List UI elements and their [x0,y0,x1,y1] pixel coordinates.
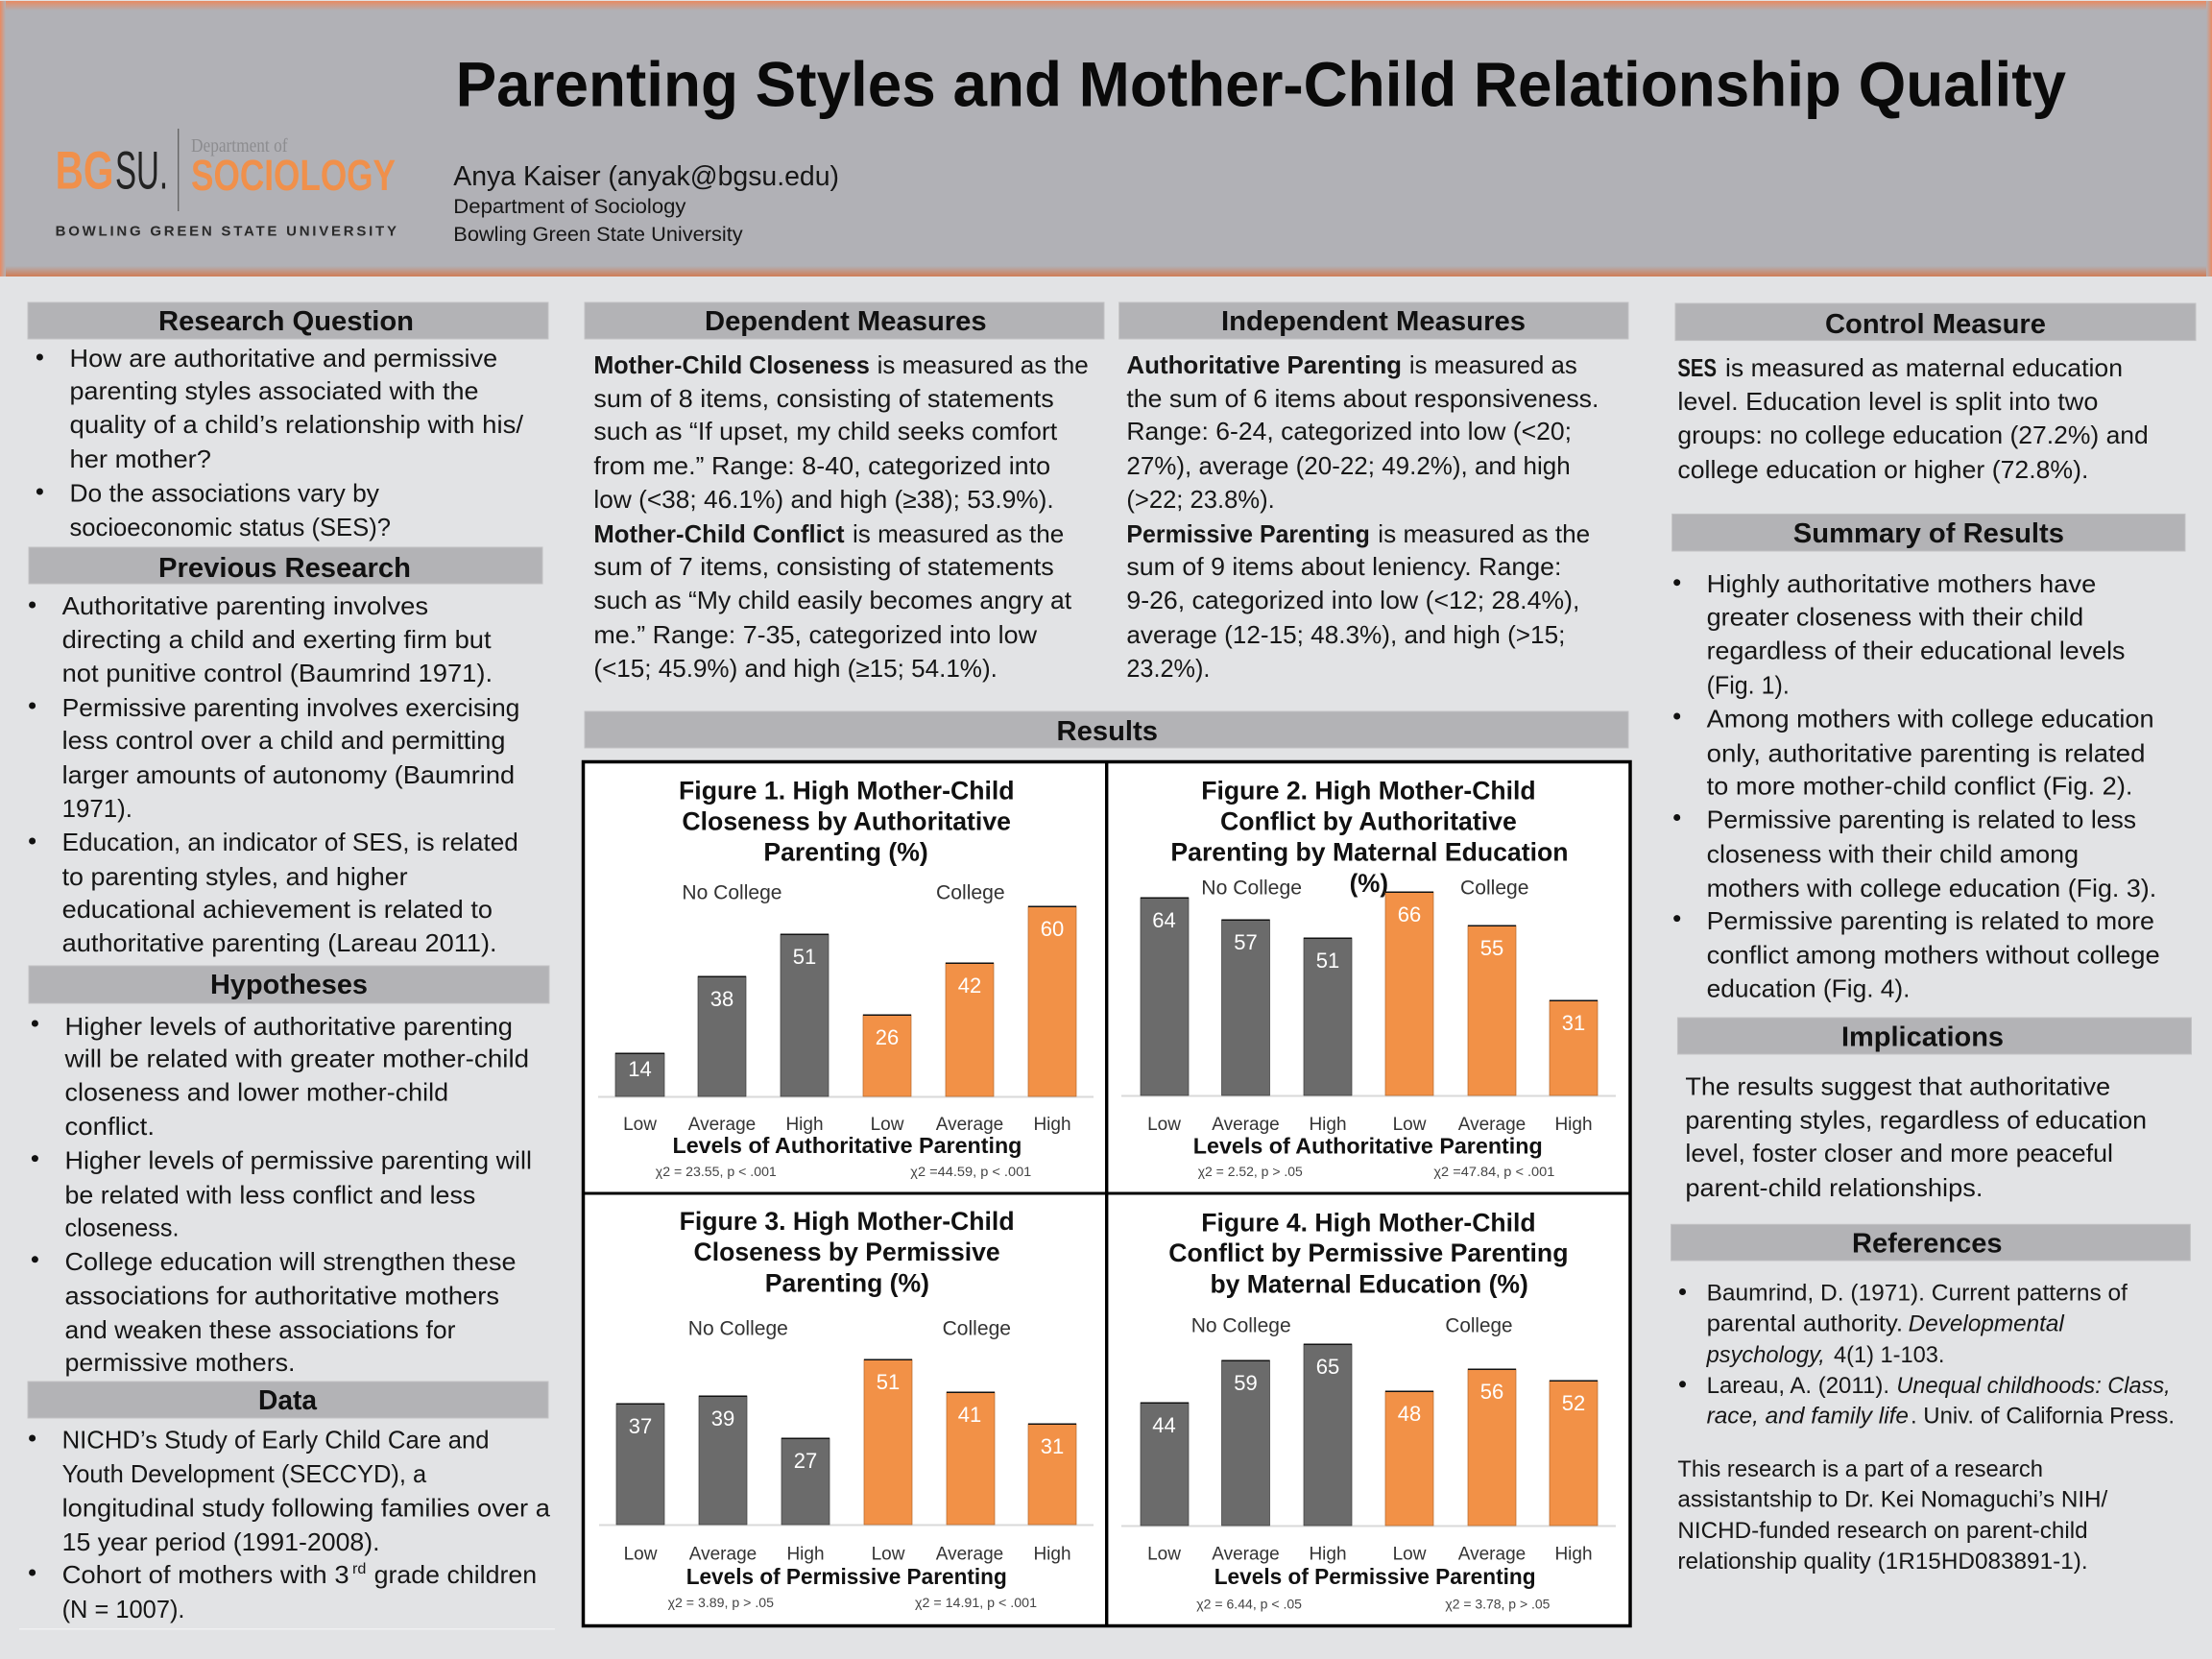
text: research question bullets: How are authoritative and permissive [69,344,497,373]
text: previous research bullets: larger amounts of autonomy (Baumrind [62,760,515,789]
text: dependent measures description: is measured as the [878,350,1089,379]
text: independent measures description: Permissive Parenting [1126,519,1370,548]
bar: college average 41: 41 [958,1403,981,1427]
text: dependent measures description: such as “My child easily becomes angry at [593,586,1072,614]
chi-square statistics [1198,1164,1555,1179]
bar: no college high 65: 65 [1316,1355,1339,1379]
axis categories: Average [1458,1544,1526,1564]
bar: no college high 51 [1304,937,1352,1095]
text: previous research bullets [29,591,519,957]
text: independent measures description [1126,350,1599,683]
bar: no college high 51 [781,933,829,1096]
axis categories: High [1554,1115,1593,1135]
axis categories: High [786,1544,825,1564]
group label: no college: No College [688,1318,788,1340]
logo: BGSU Department of Sociology [56,129,397,240]
authors and affiliation: Anya Kaiser (anyak@bgsu.edu) [453,161,839,192]
text: hypotheses bullets: be related with less conflict and less [65,1180,475,1209]
bar chart [1121,891,1616,1096]
heading: research question [28,302,548,339]
chi-square statistics [1196,1597,1551,1612]
text: previous research bullets: Education, an indicator of SES, is related [62,828,518,856]
figure 3 title [680,1207,1015,1297]
figure 1 title: Parenting (%) [763,838,928,867]
bar: college high 31 [1550,1000,1598,1095]
text: control measure description: groups: no college education (27.2%) and [1677,421,2149,449]
axis categories: Low [871,1115,904,1135]
axis categories [624,1544,1071,1564]
text: implications: parenting styles, regardless of education [1685,1106,2147,1135]
text: research question bullets: parenting styles associated with the [69,376,478,405]
text: control measure description: SES [1677,353,1717,382]
text: independent measures description: Authoritative Parenting [1126,350,1402,379]
text: previous research bullets: to parenting styles, and higher [62,862,408,891]
text: dependent measures description [593,350,1089,683]
axis title: Levels of Permissive Parenting [686,1564,1007,1589]
text: data bullets: grade children [374,1560,537,1589]
group label: college: College [936,882,1005,904]
bar: college average 42 [946,962,994,1096]
chi-square statistics [668,1595,1037,1610]
text: hypotheses bullets: closeness. [65,1213,179,1241]
text: dependent measures description: sum of 8 items, consisting of statements [593,384,1054,413]
bar chart [1121,1344,1616,1527]
figure 3 title: Parenting (%) [765,1268,929,1297]
text: independent measures description: 27%), average (20-22; 49.2%), and high [1126,451,1571,480]
text: research question bullets [36,344,524,541]
text: dependent measures description: such as “If upset, my child seeks comfort [593,417,1058,445]
logo: BGSU Department of Sociology: Department of [191,135,288,156]
axis categories: Average [689,1544,757,1564]
text: previous research bullets: directing a child and exerting firm but [62,625,492,654]
axis categories: Low [872,1544,905,1564]
bar: college low 51: 51 [877,1370,900,1394]
text: data bullets: Cohort of mothers with 3 [62,1560,349,1589]
bar: no college average 39: 39 [711,1407,734,1431]
text: independent measures description: Range: 6-24, categorized into low (<20; [1126,417,1572,445]
axis categories: Low [624,1544,658,1564]
bar: no college high 51: 51 [793,945,816,969]
bar: no college average 57: 57 [1234,930,1258,954]
axis categories: Average [1212,1544,1280,1564]
header banner [0,1,2212,276]
text: summary bullets: closeness with their child among [1707,839,2079,868]
bar: college average 56: 56 [1480,1380,1503,1404]
logo: BGSU Department of Sociology: BG [56,140,113,201]
text: data bullets [29,1426,550,1623]
text: hypotheses bullets: Higher levels of authoritative parenting [65,1012,513,1041]
figure 4 title: Figure 4. High Mother-Child [1201,1208,1536,1237]
bar: no college average 57 [1221,920,1269,1095]
chi-square statistics: χ2 = 3.78, p > .05 [1445,1597,1551,1612]
bar: college low 66 [1385,891,1433,1095]
text: reference list: psychology, [1706,1342,1825,1368]
text: dependent measures description: low (<38; 46.1%) and high (≥38); 53.9%). [593,485,1054,514]
text: independent measures description: 9-26, categorized into low (<12; 28.4%), [1126,586,1579,614]
authors and affiliation [453,161,839,246]
heading: previous research [29,547,542,584]
panel: research question [28,302,548,541]
bar: college high 31: 31 [1562,1011,1585,1035]
heading: data [28,1382,548,1418]
bar: college high 60 [1028,906,1076,1096]
heading: dependent measures: Dependent Measures [705,306,987,337]
text: acknowledgement [1677,1456,2108,1575]
text: hypotheses bullets [32,1012,532,1377]
bar chart [598,906,1094,1098]
text: summary bullets: only, authoritative parenting is related [1707,738,2145,767]
bar: no college average 38: 38 [710,987,733,1011]
bar: college average 41 [947,1392,995,1525]
bar: no college low 14: 14 [628,1057,652,1081]
text: data bullets: Youth Development (SECCYD), a [62,1459,427,1488]
group label: no college: No College [1191,1314,1291,1336]
figure 2 title: (%) [1350,869,1388,898]
text: reference list: . Univ. of California Press. [1911,1404,2175,1430]
bar: no college high 51: 51 [1316,949,1339,973]
text: research question bullets: socioeconomic status (SES)? [69,513,391,541]
figure 3 title: Closeness by Permissive [693,1238,1000,1266]
axis categories: Average [1212,1115,1280,1135]
panel: figures frame [583,761,1630,1626]
axis categories: High [1033,1544,1071,1564]
text: reference list: Baumrind, D. (1971). Current patterns of [1707,1281,2128,1306]
figure 2 [1121,776,1616,1179]
axis title: Levels of Authoritative Parenting [1193,1134,1543,1159]
figure 2 title: Conflict by Authoritative [1220,806,1517,835]
text: reference list: parental authority. [1707,1311,1903,1337]
axis categories: Average [936,1544,1003,1564]
text: hypotheses bullets: Higher levels of permissive parenting will [65,1146,532,1175]
logo: BGSU Department of Sociology: SU. [115,140,168,201]
text: previous research bullets: less control over a child and permitting [62,726,505,755]
text: summary bullets: greater closeness with their child [1707,603,2083,632]
text: data bullets: 15 year period (1991-2008). [62,1527,380,1556]
heading: results [585,711,1628,748]
bar: no college low 44 [1141,1402,1189,1526]
text: dependent measures description: Mother-Child Conflict [593,519,845,548]
title: Parenting Styles and Mother-Child Relationship Quality [456,49,2066,120]
text: hypotheses bullets: permissive mothers. [65,1348,296,1377]
bar: no college low 64: 64 [1152,908,1176,932]
heading: data: Data [258,1385,318,1416]
text: implications: The results suggest that authoritative [1685,1072,2110,1101]
heading: references: References [1852,1228,2003,1259]
text: reference list: 4(1) 1-103. [1834,1342,1945,1368]
bar: college average 42: 42 [958,974,981,998]
chi-square statistics: χ2 = 2.52, p > .05 [1198,1164,1303,1179]
text: hypotheses bullets: and weaken these associations for [65,1315,456,1344]
text: research question bullets: Do the associations vary by [69,478,379,507]
text: summary bullets: regardless of their educational levels [1707,637,2126,665]
axis categories: High [785,1115,824,1135]
heading: summary of results [1672,514,2185,551]
text: summary bullets: education (Fig. 4). [1707,974,1911,1003]
chi-square statistics [656,1164,1032,1179]
text: acknowledgement: assistantship to Dr. Kei Nomaguchi’s NIH/ [1677,1487,2108,1513]
panel: dependent measures [585,302,1104,683]
chi-square statistics: χ2 =47.84, p < .001 [1433,1164,1555,1179]
text: control measure description [1677,353,2149,484]
text: dependent measures description: me.” Range: 7-35, categorized into low [593,620,1037,649]
heading: implications [1677,1018,2191,1054]
bar: college high 52: 52 [1562,1391,1585,1415]
text: dependent measures description: Mother-Child Closeness [593,350,870,379]
text: summary bullets: Permissive parenting is related to less [1707,805,2136,834]
figure 2 title: Figure 2. High Mother-Child [1201,776,1536,805]
heading: dependent measures [585,302,1104,339]
bar: college average 55 [1468,926,1516,1095]
bar: no college average 39 [699,1396,747,1525]
text: reference list: Lareau, A. (2011). [1707,1373,1889,1399]
text: independent measures description: is measured as [1409,350,1577,379]
text: summary bullets: Among mothers with college education [1707,704,2154,733]
text: previous research bullets: 1971). [62,794,132,823]
bar: college high 31 [1028,1423,1076,1525]
axis categories [1147,1115,1593,1135]
text: implications [1685,1072,2147,1202]
bar: college low 48 [1385,1390,1433,1526]
bar: college high 31: 31 [1041,1434,1064,1458]
bar: college low 48: 48 [1398,1402,1421,1426]
axis categories: Average [1458,1115,1526,1135]
heading: control measure: Control Measure [1825,309,2046,340]
bar: no college low 37 [616,1404,664,1525]
panel: control measure [1675,303,2196,484]
text: hypotheses bullets: closeness and lower mother-child [65,1077,448,1106]
text: independent measures description: is measured as the [1378,519,1590,548]
text: data bullets: NICHD’s Study of Early Child Care and [62,1426,490,1455]
axis categories: Low [1147,1544,1181,1564]
text: research question bullets: quality of a child’s relationship with his/ [69,410,524,439]
bar: no college high 27: 27 [794,1449,817,1473]
text: summary bullets [1673,569,2160,1003]
bar chart [599,1359,1094,1527]
heading: implications: Implications [1841,1022,2004,1053]
text: acknowledgement: This research is a part of a research [1677,1456,2043,1482]
bar: college high 60: 60 [1041,917,1064,941]
text: summary bullets: Permissive parenting is related to more [1707,906,2154,935]
text: control measure description: college education or higher (72.8%). [1677,455,2088,484]
text: data bullets: longitudinal study following families over a [62,1493,550,1522]
text: summary bullets: to more mother-child conflict (Fig. 2). [1707,772,2133,801]
heading: summary of results: Summary of Results [1793,518,2064,549]
chi-square statistics: χ2 = 14.91, p < .001 [915,1595,1037,1610]
text: dependent measures description: (<15; 45.9%) and high (≥15; 54.1%). [593,654,998,683]
bar: college low 26: 26 [876,1025,899,1049]
bar: no college high 27 [781,1438,830,1525]
text: control measure description: level. Education level is split into two [1677,387,2098,416]
axis categories: Low [623,1115,657,1135]
text: dependent measures description: from me.” Range: 8-40, categorized into [593,451,1050,480]
heading: results: Results [1056,716,1158,747]
text: data bullets: (N = 1007). [62,1595,184,1623]
text: independent measures description: average (12-15; 48.3%), and high (>15; [1126,620,1565,649]
panel: previous research [29,547,542,957]
bar: college average 56 [1468,1369,1516,1526]
text: independent measures description: (>22; 23.8%). [1126,485,1275,514]
bar: no college low 37: 37 [629,1414,652,1438]
axis categories: High [1554,1544,1593,1564]
panel: implications [1677,1018,2191,1202]
heading: research question: Research Question [158,306,414,337]
text: implications: parent-child relationships. [1685,1173,1983,1202]
bar: college low 51 [864,1359,912,1525]
figure 4 [1121,1208,1616,1612]
text: data bullets: rd [352,1561,366,1577]
axis categories: Low [1147,1115,1181,1135]
chi-square statistics: χ2 =44.59, p < .001 [910,1164,1032,1179]
figure 4 title: Conflict by Permissive Parenting [1168,1238,1569,1267]
figure 2 title [1170,776,1569,898]
figure 1 title [679,776,1015,867]
heading: independent measures [1119,302,1628,339]
text: control measure description: is measured as maternal education [1725,353,2123,382]
text: acknowledgement: NICHD-funded research on parent-child [1677,1518,2088,1544]
bar: college low 26 [863,1014,911,1096]
group label: college: College [943,1318,1011,1340]
text: summary bullets: mothers with college education (Fig. 3). [1707,874,2156,902]
axis categories [623,1115,1071,1135]
figure 3 [599,1207,1094,1610]
bar: college low 66: 66 [1398,902,1421,926]
heading: hypotheses [29,966,549,1003]
axis categories: High [1309,1544,1347,1564]
panel: data [19,1382,555,1630]
heading: previous research: Previous Research [158,553,411,584]
chi-square statistics: χ2 = 6.44, p < .05 [1196,1597,1302,1612]
text: previous research bullets: authoritative parenting (Lareau 2011). [62,928,497,957]
axis categories: Average [688,1115,756,1135]
heading: references [1671,1224,2190,1261]
figure 1 [598,776,1094,1179]
axis title: Levels of Authoritative Parenting [672,1133,1022,1158]
text: independent measures description: 23.2%). [1126,654,1210,683]
panel: independent measures [1119,302,1628,683]
panel: summary of results [1672,514,2185,1003]
bar: no college low 14 [615,1052,664,1096]
bar: no college average 59: 59 [1234,1371,1258,1395]
figure 1 title: Figure 1. High Mother-Child [679,776,1015,805]
text: previous research bullets: Authoritative parenting involves [62,591,428,620]
text: summary bullets: (Fig. 1). [1707,670,1790,699]
panel: references [1671,1224,2190,1575]
text: previous research bullets: educational achievement is related to [62,895,493,924]
authors and affiliation: Bowling Green State University [453,224,743,246]
axis categories [1147,1544,1593,1564]
bar: no college average 59 [1221,1359,1269,1526]
heading: hypotheses: Hypotheses [210,970,368,1000]
group label: college: College [1460,878,1528,900]
chi-square statistics: χ2 = 23.55, p < .001 [656,1164,777,1179]
text: hypotheses bullets: conflict. [65,1112,155,1141]
text: independent measures description: the sum of 6 items about responsiveness. [1126,384,1599,413]
figure 2 title: Parenting by Maternal Education [1170,838,1569,867]
bar: no college low 64 [1141,897,1189,1095]
axis categories: Low [1393,1544,1427,1564]
text: hypotheses bullets: associations for authoritative mothers [65,1282,499,1310]
panel: hypotheses [29,966,549,1377]
figure 3 title: Figure 3. High Mother-Child [680,1207,1015,1236]
group label: no college: No College [1201,878,1302,900]
axis categories: Average [936,1115,1003,1135]
axis title: Levels of Permissive Parenting [1214,1564,1536,1589]
text: previous research bullets: not punitive control (Baumrind 1971). [62,659,493,687]
bar: college average 55: 55 [1480,936,1503,960]
axis categories: High [1033,1115,1071,1135]
text: reference list: race, and family life [1707,1404,1909,1430]
text: reference list [1679,1281,2175,1430]
text: independent measures description: sum of 9 items about leniency. Range: [1126,552,1561,581]
text: reference list: Unequal childhoods: Class, [1896,1373,2171,1399]
text: reference list: Developmental [1909,1311,2064,1337]
figure 4 title [1168,1208,1569,1299]
bar: no college high 65 [1304,1344,1352,1526]
axis categories: Low [1393,1115,1427,1135]
chi-square statistics: χ2 = 3.89, p > .05 [668,1595,774,1610]
text: dependent measures description: is measured as the [853,519,1064,548]
text: hypotheses bullets: College education will strengthen these [65,1247,517,1276]
figure 4 title: by Maternal Education (%) [1210,1270,1528,1299]
text: implications: level, foster closer and more peaceful [1685,1139,2113,1167]
logo: BGSU Department of Sociology: BOWLING GREEN STATE UNIVERSITY [56,224,397,240]
group label: no college: No College [682,882,781,904]
logo: BGSU Department of Sociology: SOCIOLOGY [191,151,396,200]
text: summary bullets: Highly authoritative mothers have [1707,569,2096,598]
heading: independent measures: Independent Measures [1221,306,1526,337]
text: dependent measures description: sum of 7 items, consisting of statements [593,552,1054,581]
group label: college: College [1445,1314,1513,1336]
bar: college high 52 [1550,1381,1598,1526]
authors and affiliation: Department of Sociology [453,196,686,218]
text: summary bullets: conflict among mothers without college [1707,941,2160,970]
text: hypotheses bullets: will be related with greater mother-child [63,1045,529,1073]
text: acknowledgement: relationship quality (1R15HD083891-1). [1677,1549,2088,1575]
bar: no college average 38 [698,975,746,1096]
bar: no college low 44: 44 [1152,1413,1176,1437]
heading: control measure [1675,303,2196,341]
text: previous research bullets: Permissive parenting involves exercising [62,693,519,722]
text: research question bullets: her mother? [69,445,211,473]
axis categories: High [1309,1115,1347,1135]
figure 1 title: Closeness by Authoritative [682,806,1011,835]
